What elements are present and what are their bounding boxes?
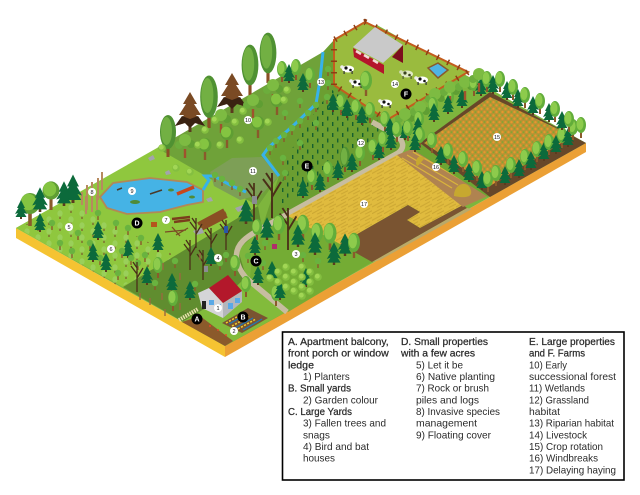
legend column A-C: houses — [303, 453, 335, 465]
legend column D: management — [416, 418, 477, 430]
platform base — [16, 25, 586, 357]
legend column A-C: 3) Fallen trees and — [303, 418, 386, 430]
map markers: numbers: 2 — [232, 329, 236, 335]
reeds — [82, 172, 102, 214]
water trough — [428, 63, 448, 78]
hay stack — [416, 156, 471, 197]
legend column E-F: 12) Grassland — [529, 394, 589, 406]
trees: riparian — [212, 66, 331, 196]
zone: dark yard — [123, 206, 288, 346]
legend column A-C: ledge — [288, 359, 314, 371]
legend column A-C: 4) Bird and bat — [303, 441, 369, 453]
legend column E-F: 15) Crop rotation — [529, 441, 603, 453]
pond and stream — [100, 52, 323, 214]
legend column A-C: 2) Garden colour — [303, 394, 378, 406]
map markers: numbers — [65, 78, 501, 335]
legend column A-C: snags — [303, 429, 330, 441]
farm yard with fence — [334, 22, 468, 120]
legend column E-F: successional forest — [529, 371, 616, 383]
legend column E-F: habitat — [529, 406, 560, 418]
garden bushes — [266, 263, 322, 300]
legend column E-F: E. Large properties — [529, 336, 615, 348]
legend column E-F — [529, 336, 616, 476]
legend column A-C: A. Apartment balcony, — [288, 336, 389, 348]
snags and bird houses — [131, 173, 296, 292]
map markers: numbers: 15 — [494, 135, 500, 141]
brush, logs and rocks — [148, 155, 246, 236]
zone: large yard — [250, 216, 372, 312]
map markers: letters: B — [240, 314, 246, 322]
legend column E-F: 10) Early — [529, 359, 568, 371]
tilled soil — [340, 205, 467, 262]
zone: wetlands — [210, 157, 279, 200]
legend column D: D. Small properties — [401, 336, 488, 348]
trees: forest — [158, 33, 315, 176]
map markers: numbers: 4 — [216, 256, 220, 262]
map markers: numbers: 7 — [164, 218, 168, 224]
map markers: letters: C — [253, 258, 259, 266]
barn — [353, 27, 403, 74]
garden beds — [209, 308, 268, 336]
map markers: numbers: 3 — [294, 252, 298, 258]
legend column D — [400, 336, 500, 441]
map markers: letters — [132, 88, 412, 324]
path — [236, 122, 403, 312]
map markers: numbers: 10 — [245, 118, 251, 124]
legend column A-C: C. Large Yards — [288, 406, 352, 418]
map markers: numbers: 16 — [433, 165, 439, 171]
legend column E-F: 16) Windbreaks — [529, 453, 598, 465]
map markers: numbers: 17 — [361, 202, 367, 208]
legend column E-F: and F. Farms — [529, 348, 585, 360]
legend column D: 9) Floating cover — [416, 429, 491, 441]
map markers: numbers: 11 — [250, 169, 256, 175]
house — [179, 275, 242, 320]
map markers: numbers: 5 — [67, 225, 71, 231]
grassland texture — [280, 90, 385, 205]
field 17: delaying haying — [288, 155, 472, 262]
legend column E-F: 13) Riparian habitat — [529, 418, 614, 430]
map markers: numbers: 6 — [109, 247, 113, 253]
legend column D: with a few acres — [400, 348, 475, 360]
legend column A-C: B. Small yards — [288, 383, 351, 395]
map markers: letters: D — [134, 220, 140, 228]
legend column D: 6) Native planting — [416, 371, 495, 383]
legend column E-F: 17) Delaying haying — [529, 464, 616, 476]
legend column D: 8) Invasive species — [416, 406, 500, 418]
map markers: numbers: 12 — [358, 141, 364, 147]
map markers: letters: E — [305, 164, 310, 170]
tan strip — [372, 208, 472, 262]
field 15: crop rotation — [420, 92, 586, 197]
legend column A-C: front porch or window — [288, 348, 389, 360]
map markers: numbers: 13 — [318, 80, 324, 86]
trees: dark yard and large yard — [139, 199, 360, 316]
map markers: numbers: 14 — [392, 82, 398, 88]
zone: grassland habitat — [262, 40, 408, 228]
brown front plot — [182, 316, 233, 346]
legend column E-F: 11) Wetlands — [529, 383, 585, 395]
legend column D: 5) Let it be — [416, 359, 463, 371]
hay band — [397, 143, 494, 207]
map markers: letters: F — [404, 92, 409, 98]
legend column D: 7) Rock or brush — [416, 383, 489, 395]
legend column A-C: 1) Planters — [303, 371, 350, 383]
trees: grassland row and windbreaks — [297, 68, 586, 198]
zone: early successional forest — [157, 52, 323, 206]
zone: garden yard — [182, 280, 288, 346]
map markers: numbers: 1 — [216, 306, 220, 312]
zone: native planting — [18, 204, 180, 287]
map markers: letters: A — [194, 316, 200, 324]
livestock — [340, 65, 428, 108]
map markers: numbers: 9 — [130, 189, 134, 195]
legend box — [282, 332, 624, 480]
legend column D: piles and logs — [416, 394, 479, 406]
legend column E-F: 14) Livestock — [529, 429, 588, 441]
map markers: numbers: 8 — [90, 190, 94, 196]
zone: meadow — [16, 148, 258, 287]
legend column A-C — [288, 336, 389, 465]
trees: left edge — [15, 174, 164, 280]
